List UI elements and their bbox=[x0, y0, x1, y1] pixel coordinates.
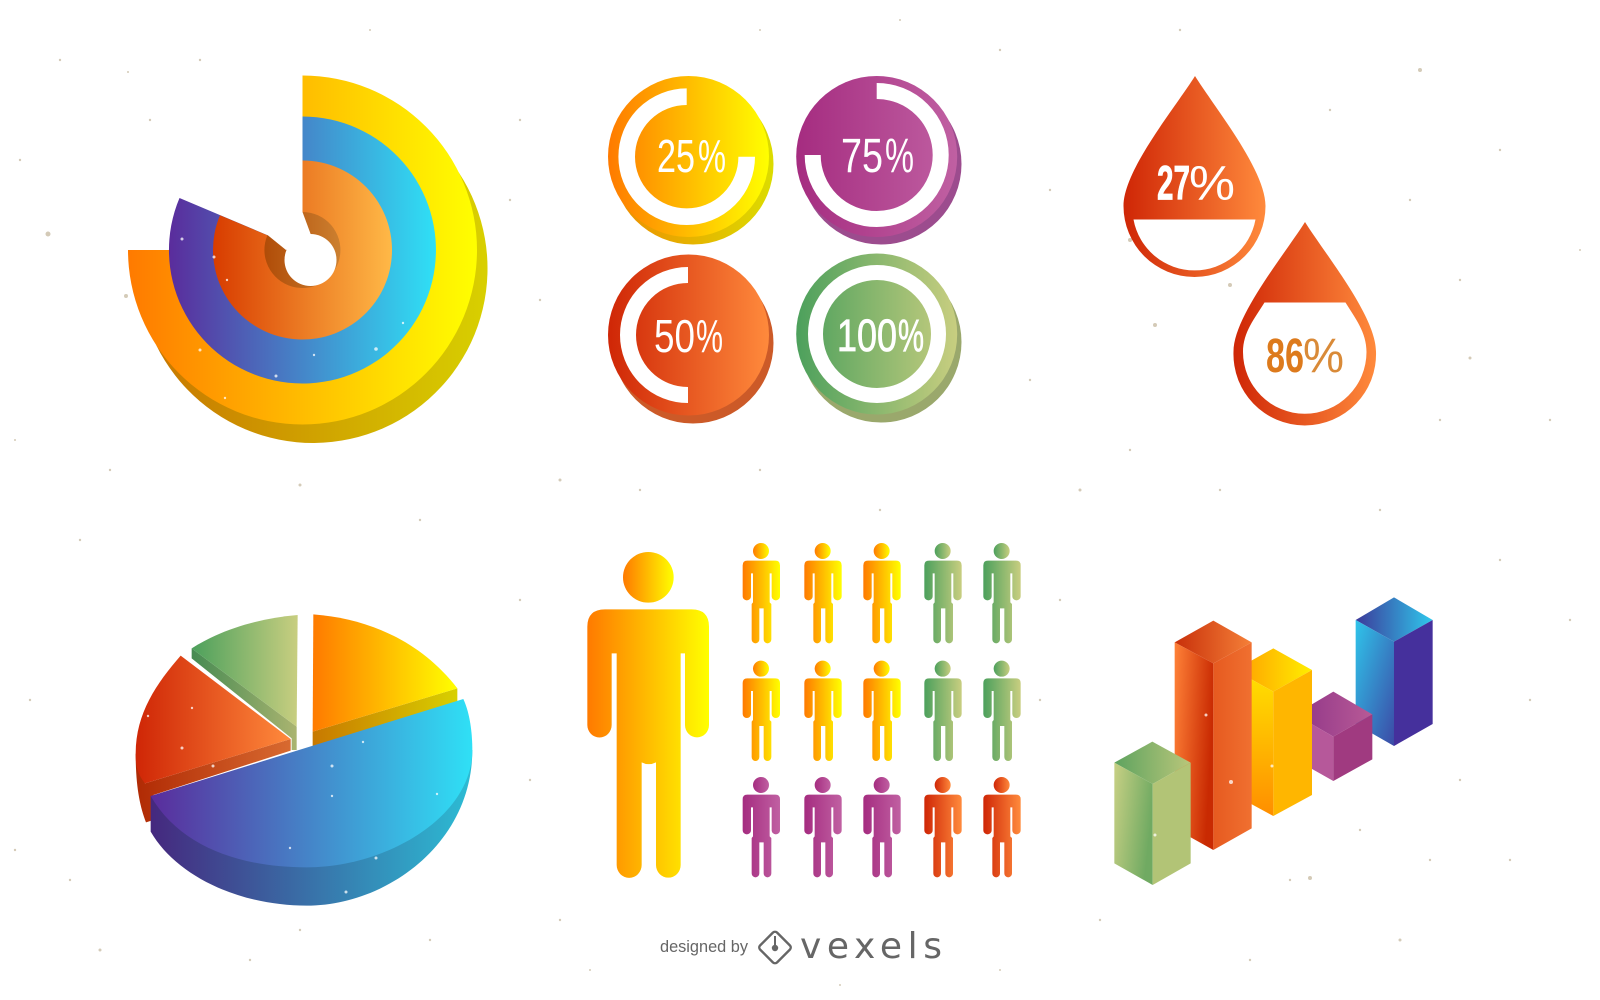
badge 50% bbox=[608, 254, 774, 424]
drop 27%: % bbox=[1189, 158, 1235, 210]
slice: green bbox=[192, 615, 298, 750]
vexels wordmark: vexels bbox=[800, 926, 942, 967]
inner ring bbox=[213, 160, 392, 340]
bar: green bbox=[1114, 742, 1191, 885]
attribution logo bbox=[660, 926, 942, 967]
drop gauges bbox=[1124, 76, 1376, 425]
slice: blue bbox=[151, 699, 472, 906]
people pictogram bbox=[587, 543, 1021, 878]
drop 86%: 86 bbox=[1266, 330, 1304, 383]
designed by label: designed by bbox=[660, 937, 748, 956]
radial ring chart bbox=[128, 76, 488, 443]
badge 75%: 75 bbox=[841, 130, 883, 183]
progress badges bbox=[608, 76, 962, 424]
bar: red bbox=[1175, 621, 1252, 850]
bar: yellow bbox=[1235, 648, 1312, 816]
outer ring bbox=[128, 76, 477, 425]
middle ring bbox=[169, 116, 436, 384]
large person bbox=[587, 552, 709, 878]
ring chart extrusion bbox=[156, 172, 488, 443]
bar: purple bbox=[1295, 692, 1372, 781]
badge 25% bbox=[608, 76, 774, 244]
ring chart hole bbox=[264, 212, 340, 288]
drop 27% bbox=[1124, 76, 1266, 277]
badge 100% bbox=[796, 254, 962, 422]
badge 75%: % bbox=[885, 130, 914, 183]
logo icon bbox=[758, 931, 792, 964]
badge 25%: 25 bbox=[657, 130, 695, 182]
badge 50%: 50 bbox=[654, 310, 695, 362]
3D pie chart bbox=[136, 614, 472, 906]
person grid bbox=[743, 543, 1021, 877]
slice: yellow bbox=[313, 614, 457, 747]
badge 100%: % bbox=[898, 310, 924, 361]
drop 86% bbox=[1233, 222, 1376, 425]
drop 27%: 27 bbox=[1157, 158, 1190, 210]
badge 50%: % bbox=[696, 310, 723, 362]
row 3 bbox=[743, 777, 1021, 877]
row 2 bbox=[743, 661, 1021, 761]
badge 25%: % bbox=[698, 130, 726, 182]
row 1 bbox=[743, 543, 1021, 643]
isometric bar chart bbox=[1114, 597, 1433, 885]
bar: blue bbox=[1356, 597, 1433, 746]
badge 75% bbox=[796, 76, 962, 244]
drop 86%: % bbox=[1303, 330, 1344, 383]
slice: red bbox=[136, 656, 291, 822]
badge 100%: 100 bbox=[837, 310, 897, 361]
